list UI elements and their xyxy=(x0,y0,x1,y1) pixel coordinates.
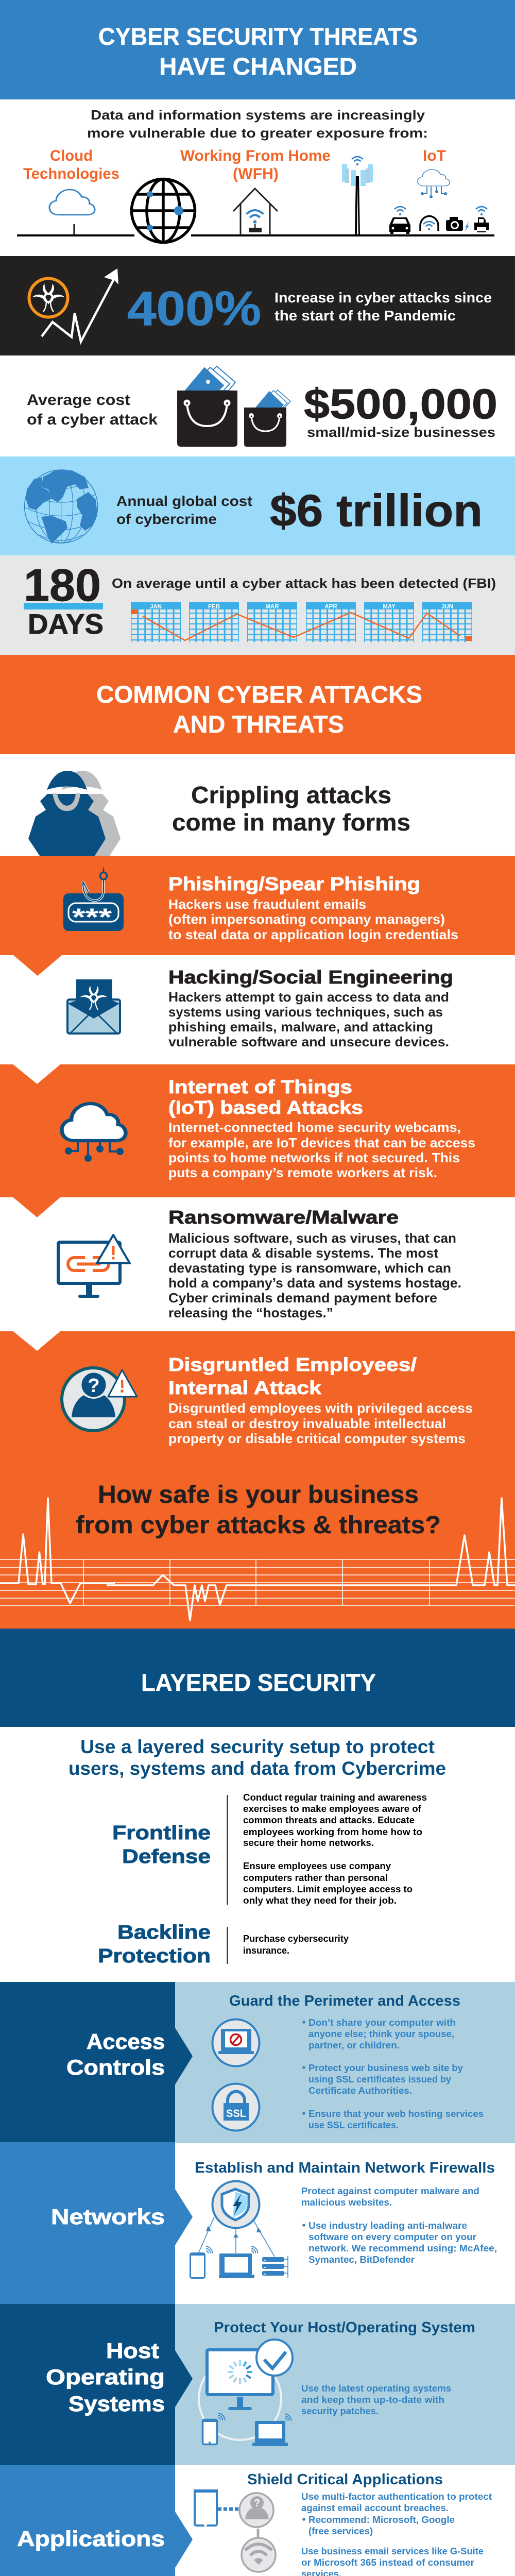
description: can steal or destroy invaluable intellectual xyxy=(168,1416,446,1431)
icon: monitor with broken link xyxy=(58,1235,130,1298)
heading: LAYERED SECURITY xyxy=(141,1669,376,1696)
title: HAVE CHANGED xyxy=(159,53,357,80)
icon: employee with warning: ? xyxy=(88,1375,100,1397)
calendars chart xyxy=(131,602,472,642)
panel: host operating systems xyxy=(0,2304,515,2465)
text: backline protection xyxy=(243,1933,349,1956)
stat description xyxy=(274,290,492,324)
bullet list: Ensure that your web hosting services xyxy=(308,2108,484,2119)
description: corrupt data & disable systems. The most xyxy=(168,1245,438,1261)
icon: money bags xyxy=(177,366,290,447)
bullet list: Protect your business web site by xyxy=(308,2062,464,2073)
bullet list: Don’t share your computer with xyxy=(308,2017,456,2028)
panel: layered security heading xyxy=(0,1629,515,1727)
panel: ransomware xyxy=(58,1207,461,1320)
heading: crippling attacks: come in many forms xyxy=(172,809,410,836)
icon: wifi speaker arch xyxy=(420,216,438,231)
text: application tips: (free services) xyxy=(308,2526,373,2536)
bullet list: using SSL certificates issued by xyxy=(308,2074,452,2084)
label xyxy=(46,2338,165,2416)
label: Operating xyxy=(46,2365,165,2389)
label: average cost: Average cost xyxy=(27,392,130,409)
text: firewall tips: Use industry leading anti-malware xyxy=(308,2220,467,2231)
heading: Internet of Things xyxy=(168,1076,352,1097)
stat: $6 trillion: $6 trillion xyxy=(270,486,483,536)
icon: multi-factor diagram: ? xyxy=(254,2498,260,2509)
text: host tip: and keep them up-to-date with xyxy=(301,2394,444,2405)
label: Applications xyxy=(17,2527,165,2551)
question callout: How safe is your business xyxy=(98,1481,419,1509)
heading xyxy=(96,681,422,738)
description: devastating type is ransomware, which can xyxy=(168,1260,451,1276)
text: application tips: against email account breaches. xyxy=(301,2502,449,2513)
label: Controls xyxy=(66,2055,165,2079)
heading: Shield Critical Applications xyxy=(247,2471,443,2488)
heading: Protect Your Host/Operating System xyxy=(214,2319,475,2336)
intro text: more vulnerable due to greater exposure from: xyxy=(87,125,428,141)
detection caption: On average until a cyber attack has been detected (FBI) xyxy=(112,575,496,591)
description: Internet-connected home security webcams, xyxy=(168,1120,461,1135)
icon: monitor update xyxy=(199,2340,293,2446)
panel: annual global cost xyxy=(0,456,515,555)
heading: Guard the Perimeter and Access xyxy=(229,1993,460,2009)
description: Cyber criminals demand payment before xyxy=(168,1290,437,1306)
text: application tips: Use business email services like G-Suite xyxy=(301,2546,484,2556)
bullet list xyxy=(302,2017,484,2130)
bullet list: partner, or children. xyxy=(308,2040,400,2050)
text: frontline defense: Conduct regular training and awareness xyxy=(243,1792,427,1803)
panel: frontline and backline xyxy=(68,1736,446,1967)
icon: firewall network diagram xyxy=(190,2181,288,2278)
label xyxy=(66,2029,165,2079)
icon: laptop blocked xyxy=(212,2020,260,2066)
icon: world globe xyxy=(25,470,98,544)
stat: 180 days: DAYS xyxy=(28,608,104,640)
question callout: from cyber attacks & threats? xyxy=(76,1512,441,1539)
text: backline protection: Purchase cybersecurity xyxy=(243,1933,349,1944)
panel: disgruntled employees xyxy=(0,1331,515,1629)
bullet list: anyone else; think your spouse, xyxy=(308,2028,454,2039)
chart: pulse line xyxy=(0,1498,515,1620)
icon: car xyxy=(389,207,410,234)
text: frontline defense: computers rather than personal xyxy=(243,1872,388,1883)
text: frontline defense: common threats and attacks. Educate xyxy=(243,1815,415,1825)
label: iot: IoT xyxy=(423,147,446,164)
text: host tip: security patches. xyxy=(301,2405,379,2416)
description: vulnerable software and unsecure devices. xyxy=(168,1034,449,1049)
panel: internet of things xyxy=(0,1064,515,1217)
description xyxy=(168,896,458,942)
label: backline protection xyxy=(98,1922,211,1967)
icon: ssl lock xyxy=(212,2083,260,2131)
label: cloud technologies: Cloud xyxy=(50,147,93,164)
stat: 400%: 400% xyxy=(127,281,261,335)
icon: iot cloud xyxy=(62,1104,126,1162)
icon: infected email xyxy=(67,979,120,1033)
description xyxy=(168,1230,461,1320)
stat: $500,000: $500,000 xyxy=(304,381,497,428)
label: annual global cost xyxy=(116,493,252,527)
title: CYBER SECURITY THREATS xyxy=(98,23,418,50)
heading: Phishing/Spear Phishing xyxy=(168,873,420,894)
intro text: Data and information systems are increasingly xyxy=(91,107,425,123)
description xyxy=(168,989,449,1049)
panel: hacking xyxy=(67,967,453,1049)
heading: Establish and Maintain Network Firewalls xyxy=(195,2160,495,2176)
description: phishing emails, malware, and attacking xyxy=(168,1019,433,1035)
stat label: small/mid-size businesses xyxy=(307,425,495,440)
description: property or disable critical computer systems xyxy=(168,1431,466,1446)
description: (often impersonating company managers) xyxy=(168,911,445,927)
text: firewall tips: Symantec, BitDefender xyxy=(308,2254,415,2265)
text: application tips: Recommend: Microsoft, Google xyxy=(308,2514,455,2525)
panel: 180 days xyxy=(0,555,515,655)
description: systems using various techniques, such as xyxy=(168,1004,443,1020)
description: to steal data or application login credentials xyxy=(168,927,458,942)
panel: exposure xyxy=(17,107,494,242)
icon: hooded hacker xyxy=(28,771,121,856)
calendars chart: JAN xyxy=(150,604,162,610)
label: annual global cost: Annual global cost xyxy=(116,493,252,509)
text: frontline defense: only what they need for their job. xyxy=(243,1895,397,1906)
question callout xyxy=(76,1481,441,1539)
calendars chart: MAR xyxy=(265,604,279,610)
label: frontline defense xyxy=(112,1822,211,1868)
icon: house with wifi xyxy=(233,189,278,235)
heading: crippling attacks: Crippling attacks xyxy=(191,782,391,808)
text: application tips: Use multi-factor authentication to protect xyxy=(301,2491,492,2502)
panel: header xyxy=(0,0,515,99)
subheading xyxy=(68,1736,446,1779)
label: average cost xyxy=(27,392,158,428)
calendars chart: MAY xyxy=(383,604,396,610)
description: Disgruntled employees with privileged access xyxy=(168,1400,473,1416)
title xyxy=(98,23,418,80)
heading xyxy=(168,1076,363,1118)
description: Malicious software, such as viruses, that can xyxy=(168,1230,456,1246)
label: backline protection: Protection xyxy=(98,1945,211,1967)
heading xyxy=(168,1354,417,1398)
text: application tips: or Microsoft 365 instead of consumer xyxy=(301,2557,474,2568)
stat description: Increase in cyber attacks since xyxy=(274,290,492,306)
panel: average cost xyxy=(27,366,497,447)
calendars chart: FEB xyxy=(208,604,220,610)
heading: Hacking/Social Engineering xyxy=(168,967,453,988)
label: annual global cost: of cybercrime xyxy=(116,511,217,527)
icon: cloud xyxy=(49,190,95,215)
text: backline protection: insurance. xyxy=(243,1945,289,1956)
label: working from home: Working From Home xyxy=(180,147,331,164)
panel: phishing xyxy=(0,856,515,976)
heading: AND THREATS xyxy=(173,710,344,738)
icon: biohazard ring xyxy=(29,278,68,317)
bullet list: Certificate Authorities. xyxy=(308,2085,412,2096)
icon: multi-factor diagram xyxy=(191,2489,276,2576)
heading: Internal Attack xyxy=(168,1377,322,1398)
intro text xyxy=(87,107,428,141)
icon: iot cloud xyxy=(418,170,450,198)
panel: 400 percent increase xyxy=(0,256,515,355)
label: frontline defense: Defense xyxy=(122,1846,211,1868)
stat description: the start of the Pandemic xyxy=(274,308,456,324)
icon: fishing hook and password xyxy=(63,868,124,931)
label: Host xyxy=(106,2338,159,2363)
label: frontline defense: Frontline xyxy=(112,1822,211,1844)
text: firewall tips: Protect against computer malware and xyxy=(301,2185,479,2196)
text: frontline defense: Ensure employees use company xyxy=(243,1860,391,1871)
heading: crippling attacks xyxy=(172,782,410,836)
description xyxy=(168,1400,473,1446)
heading: Ransomware/Malware xyxy=(168,1207,399,1228)
calendars chart: APR xyxy=(324,604,337,610)
stat: 180 days: 180 xyxy=(24,560,101,611)
text: firewall tips: software on every computer on your xyxy=(308,2231,476,2242)
description xyxy=(168,1120,475,1180)
label: Networks xyxy=(51,2205,165,2229)
text: frontline defense: employees working from home how to xyxy=(243,1826,422,1837)
description: for example, are IoT devices that can be access xyxy=(168,1135,475,1150)
panel: applications xyxy=(0,2465,492,2576)
description: Hackers use fraudulent emails xyxy=(168,896,366,912)
label: cloud technologies: Technologies xyxy=(23,165,119,182)
description: Hackers attempt to gain access to data and xyxy=(168,989,449,1005)
label: working from home: (WFH) xyxy=(233,165,279,182)
description: points to home networks if not secured. This xyxy=(168,1150,460,1165)
text: frontline defense: computers. Limit employee access to xyxy=(243,1884,413,1894)
icon: ssl lock: SSL xyxy=(226,2108,246,2120)
text: firewall tips xyxy=(301,2185,497,2265)
stat: 180 days xyxy=(24,560,104,640)
icon: printer xyxy=(474,207,489,232)
label: Access xyxy=(87,2029,165,2054)
subheading: users, systems and data from Cybercrime xyxy=(68,1758,446,1779)
description: puts a company’s remote workers at risk. xyxy=(168,1165,437,1180)
icon: cell tower xyxy=(342,157,373,235)
heading: Disgruntled Employees/ xyxy=(168,1354,417,1375)
icon: camera xyxy=(446,217,470,232)
text: host tip xyxy=(301,2383,451,2416)
description: hold a company’s data and systems hostage. xyxy=(168,1275,461,1291)
heading: COMMON CYBER ATTACKS xyxy=(96,681,422,708)
text: host tip: Use the latest operating systems xyxy=(301,2383,451,2394)
label: backline protection: Backline xyxy=(117,1922,211,1943)
panel: access controls xyxy=(0,1982,515,2143)
panel: common attacks heading xyxy=(0,655,515,754)
calendars chart: JUN xyxy=(441,604,453,610)
description: releasing the “hostages.” xyxy=(168,1305,333,1320)
icon: employee with warning xyxy=(62,1368,137,1431)
bullet list: use SSL certificates. xyxy=(308,2120,399,2130)
text: frontline defense xyxy=(243,1792,427,1906)
label: cloud technologies xyxy=(23,147,119,182)
label: working from home xyxy=(180,147,331,182)
text: application tips xyxy=(301,2491,492,2576)
icon: rising arrow xyxy=(42,268,118,342)
ground line xyxy=(17,224,494,236)
text: firewall tips: network. We recommend using: McAfee, xyxy=(308,2243,497,2253)
subheading: Use a layered security setup to protect xyxy=(80,1736,435,1757)
text: frontline defense: exercises to make employees aware of xyxy=(243,1803,422,1814)
label: average cost: of a cyber attack xyxy=(27,411,158,428)
panel: networks xyxy=(0,2142,497,2304)
text: firewall tips: malicious websites. xyxy=(301,2197,392,2208)
label: Systems xyxy=(68,2392,165,2416)
text: frontline defense: secure their home networks. xyxy=(243,1837,374,1848)
icon: fishing hook and password: *** xyxy=(72,903,112,930)
icon: globe xyxy=(132,179,195,242)
heading: (IoT) based Attacks xyxy=(168,1097,363,1118)
